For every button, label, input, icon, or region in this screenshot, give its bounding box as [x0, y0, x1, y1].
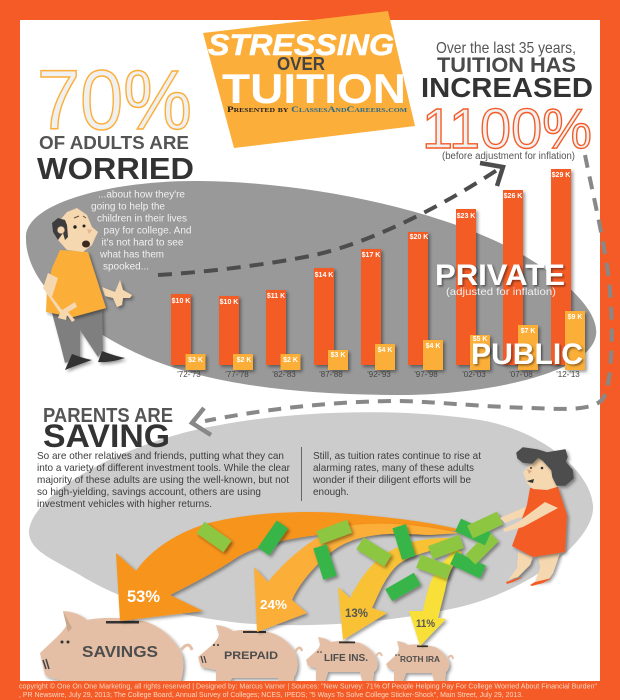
footer line 1: copyright © One On One Marketing, all rights reserved | Designed by: Marcus Varner | Sources: "New Survey: 71% Of People Helping Pay For College Worried About Financial Burden": [19, 682, 598, 690]
year labels: '07-'08: [509, 370, 533, 379]
bar values: $2 K: [188, 357, 203, 364]
year labels: '72-'73: [177, 370, 201, 379]
bar values: $14 K: [315, 272, 333, 279]
text block: right: wonder if their diligent efforts will be: [312, 474, 471, 486]
text block: left: into a variety of different investment tools. While the clear: [37, 462, 290, 474]
bar values: [172, 172, 582, 364]
text block: left: investment vehicles with higher returns.: [37, 498, 212, 510]
piggy bank: roth ira: ROTH IRA: [400, 655, 440, 664]
text block: left: majority of these adults are using the well-known, but not: [37, 474, 289, 486]
text block: left: [37, 450, 290, 510]
title: tuition: TUITION: [222, 65, 406, 112]
piggy bank: roth ira: [386, 641, 453, 690]
label: adjusted for inflation: (adjusted for inflation): [446, 286, 556, 298]
title: stressing: STRESSING: [208, 29, 394, 62]
bar values: $11 K: [267, 293, 285, 300]
stat: 70% of adults are worried: [37, 53, 194, 186]
stat: 70% of adults are worried: OF ADULTS ARE: [39, 133, 189, 153]
text block: right: enough.: [313, 486, 349, 498]
year labels: '02-'03: [462, 370, 486, 379]
man intro text: [91, 190, 192, 272]
public bars: [186, 311, 585, 370]
arrow: life insurance 13%: 13%: [345, 606, 368, 620]
bar values: $17 K: [362, 252, 380, 259]
bar chart: private vs public tuition: [171, 169, 585, 379]
man intro text: it's not hard to see: [102, 238, 184, 248]
bar values: $10 K: [172, 298, 190, 305]
bar values: $26 K: [504, 193, 522, 200]
money bills: [196, 512, 503, 601]
arrow: savings 53%: [116, 512, 462, 621]
year labels: '82-'83: [272, 370, 296, 379]
bar values: $7 K: [521, 328, 535, 335]
label: public: PUBLIC: [471, 338, 583, 371]
arrow: roth ira 11%: 11%: [416, 618, 435, 630]
stat: tuition increased 1100%: [421, 40, 593, 162]
man intro text: ...about how they're: [98, 190, 185, 200]
year labels: [177, 370, 580, 379]
footer: [0, 681, 620, 700]
stat: tuition increased 1100%: 1100%: [422, 97, 592, 161]
arrow: life insurance 13%: [338, 538, 460, 640]
arrow: roth ira 11%: [409, 548, 462, 646]
heading: parents are saving: SAVING: [43, 418, 170, 454]
title badge: [203, 11, 415, 148]
heading: parents are saving: [43, 405, 173, 454]
stat: tuition increased 1100%: (before adjustment for inflation): [442, 151, 575, 162]
stat: tuition increased 1100%: TUITION HAS: [437, 54, 576, 77]
text block: right: alarming rates, many of these adults: [313, 462, 474, 474]
bar values: $5 K: [473, 336, 487, 343]
worried man figure: [43, 208, 132, 370]
man intro text: children in their lives: [97, 214, 187, 224]
stat: 70% of adults are worried: 70%: [37, 53, 192, 147]
bar values: $2 K: [283, 357, 298, 364]
piggy bank: life insurance: [306, 637, 382, 690]
worried woman figure: [500, 448, 573, 586]
bar values: $10 K: [220, 299, 238, 306]
arrow: prepaid 24%: 24%: [260, 597, 287, 612]
bar values: $4 K: [378, 347, 392, 354]
heading: parents are saving: PARENTS ARE: [43, 405, 173, 427]
text block: right: [312, 450, 481, 498]
piggy bank: savings: [40, 611, 192, 690]
piggy bank: prepaid: PREPAID: [224, 650, 278, 662]
man intro text: what has them: [99, 250, 164, 260]
piggy bank: life insurance: LIFE INS.: [324, 652, 368, 664]
label: private: PRIVATE: [435, 259, 565, 292]
year labels: '87-'88: [319, 370, 343, 379]
grey blob: upper: [26, 181, 596, 395]
title: over: OVER: [277, 54, 325, 74]
year labels: '12-'13: [556, 370, 580, 379]
bar values: $4 K: [426, 343, 440, 350]
grey blob: lower: [29, 412, 593, 625]
year labels: '77-'78: [225, 370, 249, 379]
man intro text: spooked...: [103, 262, 149, 272]
private bars: [171, 169, 571, 365]
stat: 70% of adults are worried: WORRIED: [37, 151, 194, 186]
bar values: $20 K: [410, 234, 428, 241]
footer line 2: , PR Newswire, July 29, 2013; The College Board, Annual Survey of Colleges; NCES, IPEDS; "5 Ways To Solve College Sticker-Shock", Main Street, July 29, 2013.: [19, 692, 523, 699]
piggy bank: prepaid: [198, 625, 302, 690]
arrow: dashed to parents are saving: [192, 155, 612, 435]
text block: left: so high-yielding, savings account, others are using: [37, 486, 261, 498]
text block: right: Still, as tuition rates continue to rise at: [313, 450, 481, 462]
stat: tuition increased 1100%: INCREASED: [421, 72, 593, 103]
arrow: prepaid 24%: [254, 524, 460, 632]
year labels: '92-'93: [367, 370, 391, 379]
stat: tuition increased 1100%: Over the last 35 years,: [436, 40, 576, 57]
bar values: $9 K: [568, 314, 582, 321]
bar values: $3 K: [331, 352, 345, 359]
bar values: $2 K: [237, 357, 251, 364]
bar values: $29 K: [552, 172, 570, 179]
bar values: $23 K: [457, 213, 475, 220]
arrow: savings 53%: 53%: [127, 587, 160, 606]
title: presented by: Presented by ClassesAndCareers.com: [227, 104, 407, 114]
text block: left: So are other relatives and friends, putting what they can: [37, 450, 284, 462]
year labels: '97-'98: [414, 370, 438, 379]
man intro text: going to help the: [91, 202, 165, 212]
arrow: dashed to 1100%: [158, 163, 503, 275]
piggy bank: savings: SAVINGS: [82, 644, 158, 661]
man intro text: pay for college. And: [104, 226, 192, 236]
